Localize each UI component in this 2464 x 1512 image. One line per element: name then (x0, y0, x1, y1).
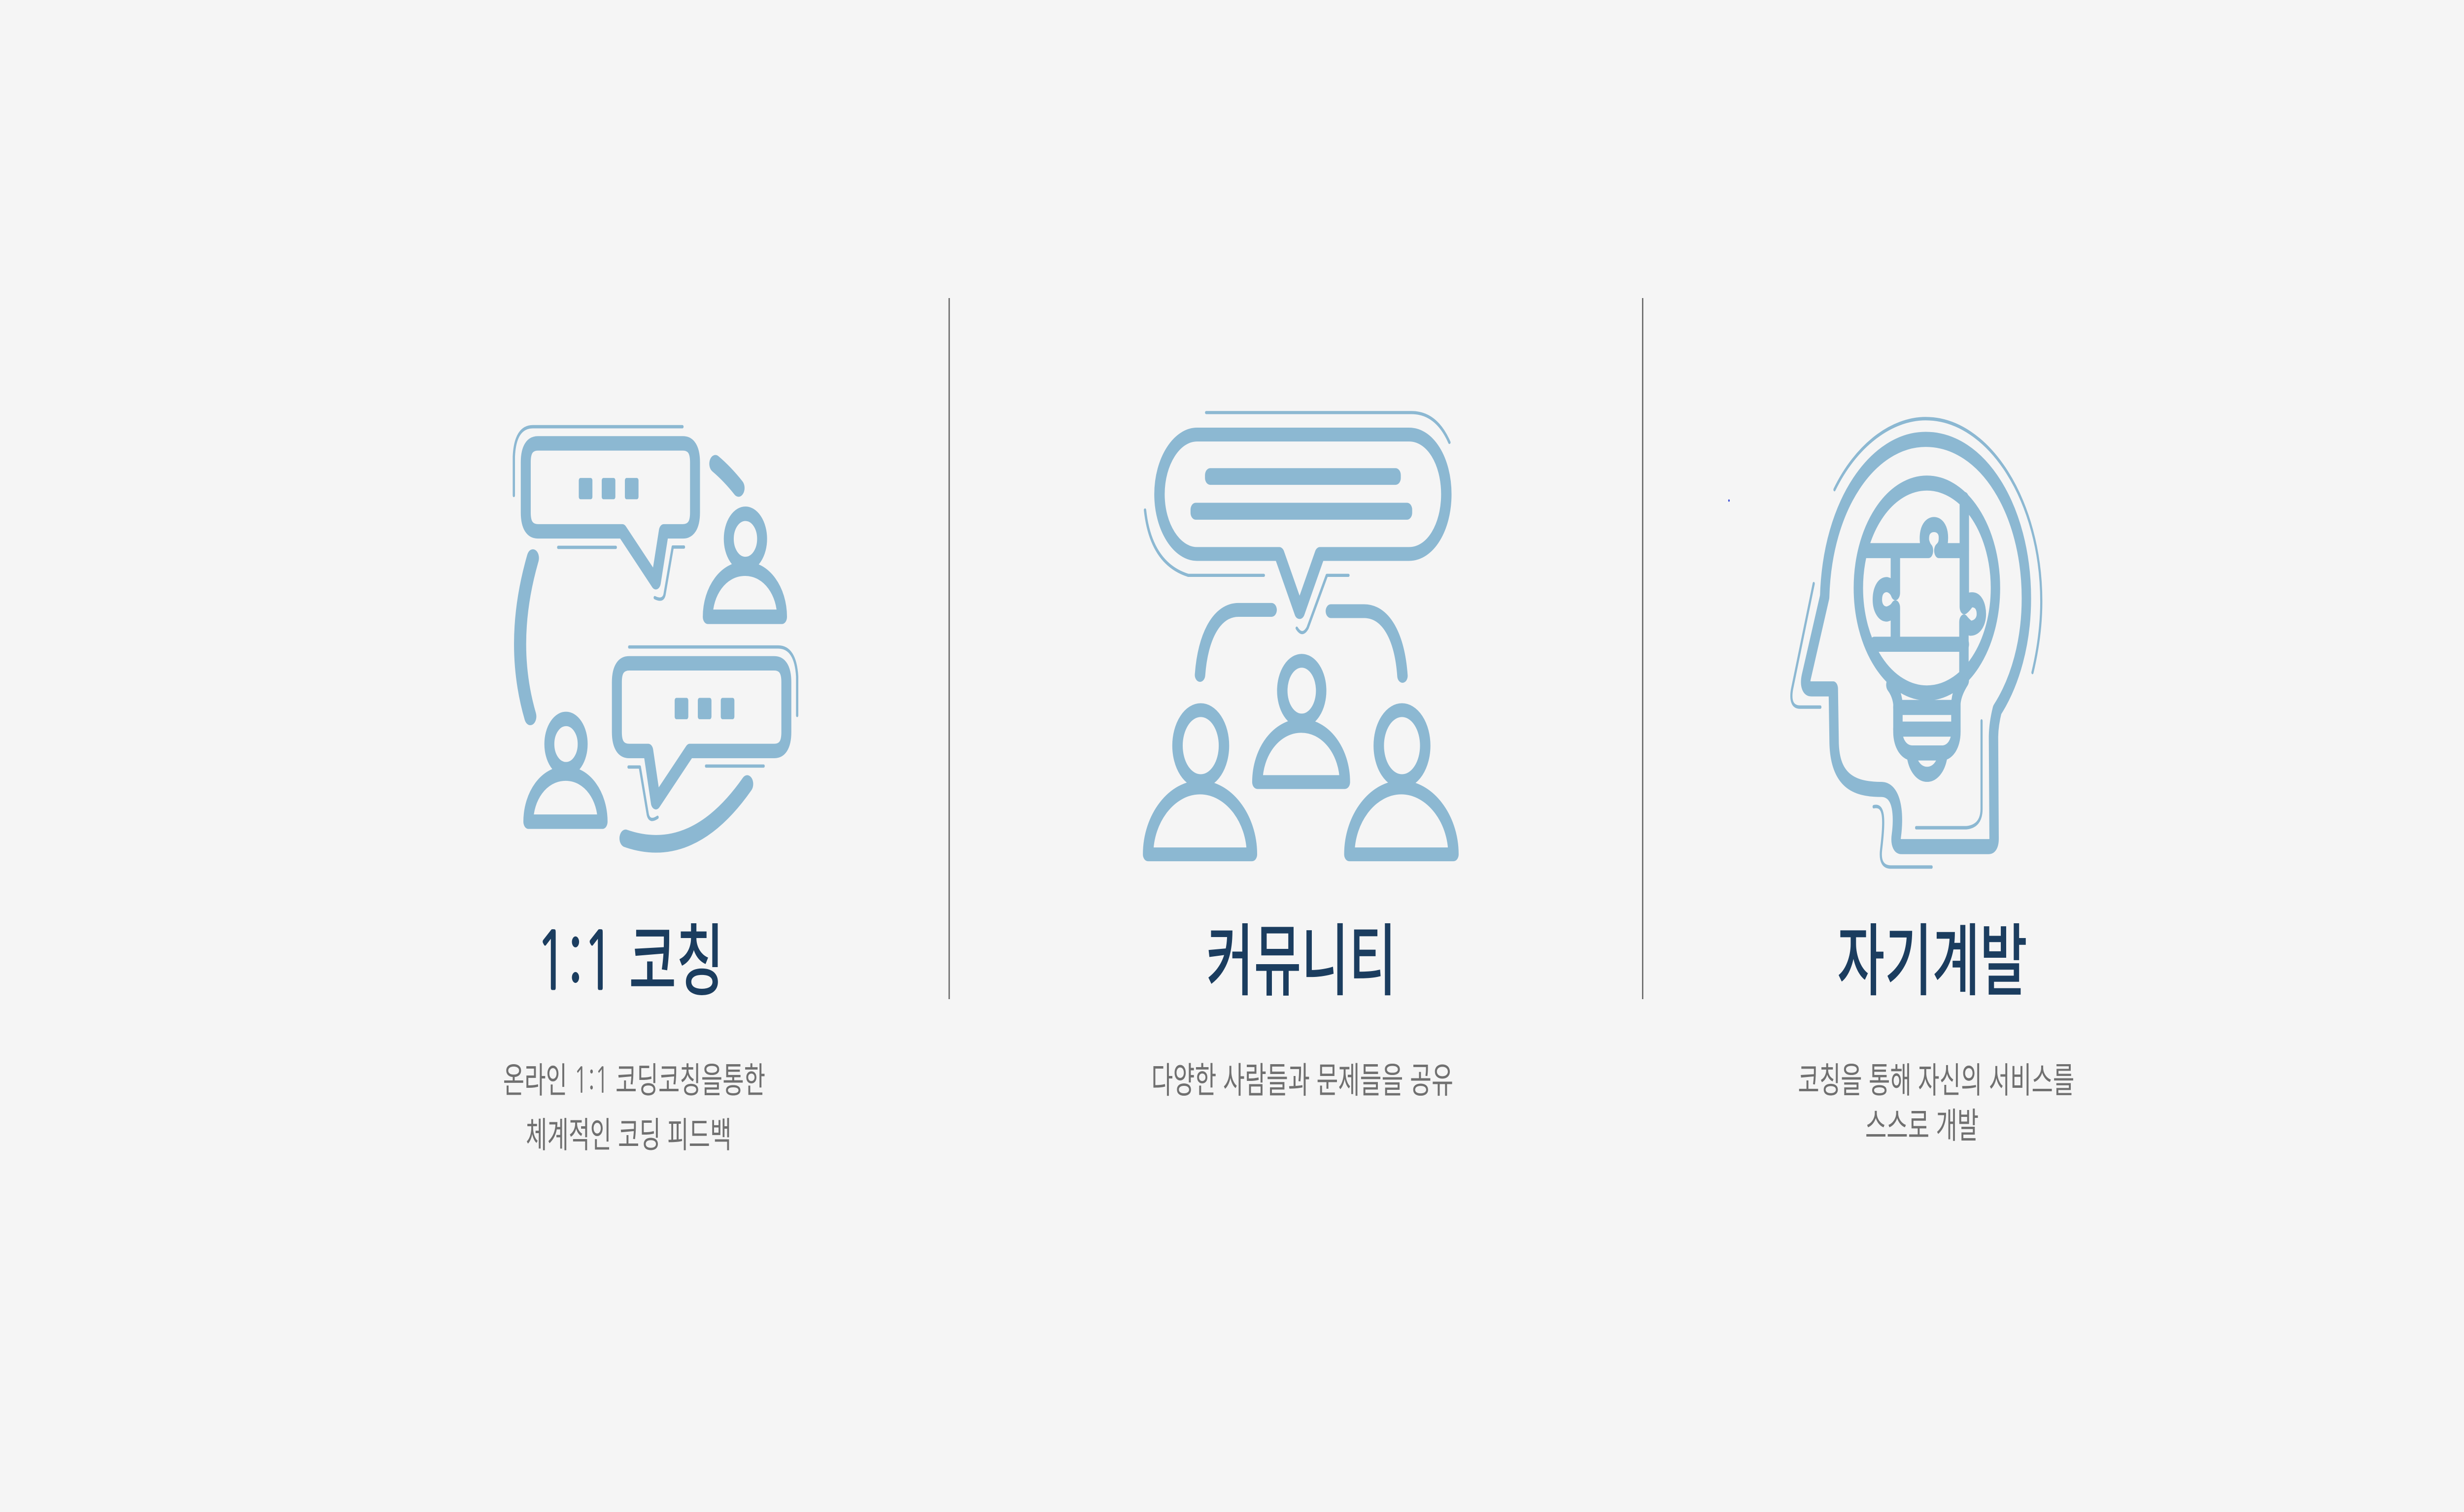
divider right (1642, 298, 1643, 999)
panel: 1:1 coaching (503, 427, 797, 1158)
panel: self development (1791, 419, 2074, 1148)
heading: 1:1 coaching: 1:1 코칭 (536, 897, 724, 1011)
text block: coaching description: 체계적인 코딩 피드백 (526, 1106, 731, 1158)
heading: community: 커뮤니티 (1206, 897, 1397, 1011)
icon: three people sharing a speech bubble (1145, 412, 1453, 854)
text block: self development description: 코칭을 통해 자신의 서비스를 (1798, 1051, 2074, 1103)
heading: self development: 자기계발 (1837, 897, 2027, 1011)
text block: self development description: 스스로 개발 (1865, 1097, 1979, 1148)
text block: community description: 다양한 사람들과 문제들을 공유 (1151, 1051, 1453, 1103)
stray dot (1728, 500, 1730, 502)
icon: head with puzzle light bulb (1791, 419, 2041, 867)
text block: coaching description: 온라인 1:1 코딩코칭을통한 (503, 1051, 765, 1103)
icon: two people chatting (514, 427, 797, 844)
text block: coaching description (503, 1051, 765, 1158)
text block: self development description (1798, 1051, 2074, 1148)
panel: community (1145, 412, 1453, 1103)
divider left (949, 298, 950, 999)
